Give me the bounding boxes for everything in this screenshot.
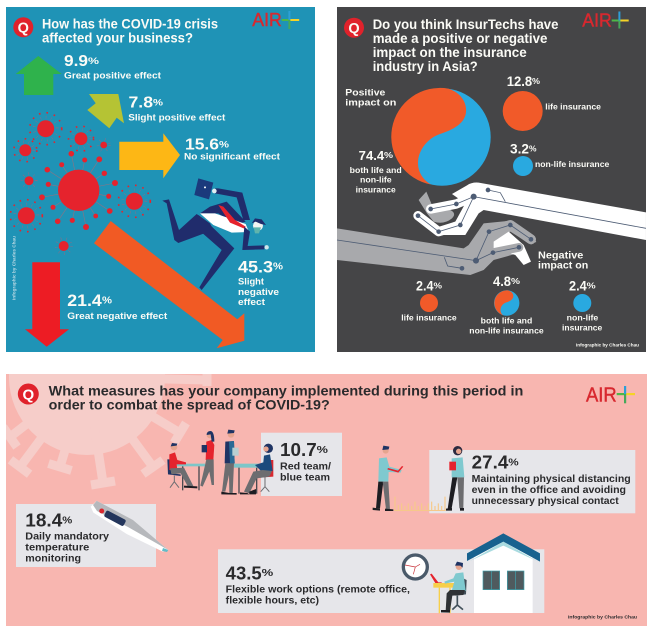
stat: slight negative effect [238, 258, 283, 308]
card: physical distancing: even in the office and avoiding [472, 485, 626, 496]
stat: 3.2 non-life insurance: non-life insurance [535, 159, 610, 169]
stat: 4.8 both: % [511, 277, 520, 286]
stat: 2.4 non-life insurance [562, 279, 603, 333]
watermark: large virus [6, 374, 212, 490]
stat: 12.8 life insurance [503, 74, 601, 131]
illustration: two people keeping distance [373, 446, 464, 511]
icon: Q badge [344, 18, 364, 38]
panel: business effect [6, 7, 315, 352]
stat: 74.4 both life and non-life: non-life [360, 174, 392, 184]
arrow: great positive [16, 56, 62, 95]
arrow: slight positive [87, 94, 124, 128]
stat: great negative effect [67, 291, 167, 321]
stat: great negative effect: 21.4 [67, 291, 102, 310]
stat: great negative effect: % [102, 296, 112, 306]
heading: order to combat the spread of COVID-19? [49, 397, 330, 413]
stat: 74.4 both life and non-life: both life and [350, 165, 402, 175]
icon: Q badge [13, 17, 33, 37]
card: red team / blue team: Red team/ [280, 461, 331, 472]
stat: 4.8 both [469, 274, 544, 336]
card: flexible work: Flexible work options (remote office, [226, 584, 410, 595]
logo: AIR+: AIR [582, 10, 612, 30]
illustration: robot and human hands [337, 183, 646, 275]
card: flexible work: % [262, 567, 274, 579]
card: flexible work [218, 549, 544, 613]
card: temperature monitoring: % [62, 514, 73, 526]
stat: 2.4 life insurance: life insurance [401, 313, 457, 323]
card: physical distancing: % [508, 456, 519, 468]
stat: 2.4 non-life insurance: 2.4 [569, 279, 587, 294]
credit: Infographic by Charles Chau [12, 236, 16, 300]
stat: 74.4 both life and non-life: % [384, 151, 393, 160]
logo: AIR+ [582, 10, 629, 30]
stat: slight negative effect: negative [238, 287, 279, 298]
stat: great positive effect: % [88, 56, 99, 66]
label: negative impact on [538, 251, 588, 272]
stat: 3.2 non-life insurance [510, 141, 610, 176]
stat: 12.8 life insurance: % [532, 77, 540, 86]
card: red team / blue team: % [317, 444, 329, 456]
heading: impact on the insurance [373, 45, 527, 60]
logo: AIR+ [252, 10, 299, 30]
stat: 3.2 non-life insurance: 3.2 [510, 141, 529, 156]
heading: made a positive or negative [373, 31, 548, 46]
card: temperature monitoring [16, 504, 156, 567]
stat: slight positive effect: Slight positive effect [128, 112, 225, 123]
logo: AIR+ [586, 385, 635, 407]
arrow: great negative [25, 262, 69, 347]
stat: great positive effect: 9.9 [64, 53, 88, 70]
stat: 12.8 life insurance: life insurance [545, 102, 601, 112]
card: physical distancing: Maintaining physical distancing [472, 474, 631, 485]
card: red team / blue team: 10.7 [280, 440, 317, 460]
stat: 4.8 both: both life and [481, 316, 532, 326]
stat: 74.4 both life and non-life [350, 148, 402, 194]
card: flexible work: 43.5 [226, 563, 262, 583]
stat: 74.4 both life and non-life: 74.4 [359, 148, 385, 163]
stat: no significant effect: % [219, 140, 229, 150]
figure: falling businessman [162, 178, 269, 290]
stat: slight negative effect: % [273, 262, 283, 272]
card: red team / blue team [261, 433, 342, 496]
stat: slight positive effect: 7.8 [128, 94, 153, 112]
panel background [6, 374, 647, 626]
label: positive impact on [345, 88, 396, 108]
chart: yin-yang both life and non-life [391, 88, 491, 186]
heading: Do you think InsurTechs have [373, 17, 559, 32]
stat: great positive effect [64, 53, 161, 80]
logo: AIR+: AIR [586, 385, 617, 407]
stat: 2.4 life insurance: 2.4 [416, 279, 434, 294]
heading: industry in Asia? [373, 59, 478, 74]
stat: slight negative effect: effect [238, 297, 266, 308]
icon: Q badge: Q [22, 386, 34, 404]
card: physical distancing [429, 450, 635, 513]
card: red team / blue team: blue team [280, 472, 330, 483]
heading [49, 383, 523, 413]
panel background [6, 7, 315, 352]
stat: 3.2 non-life insurance: % [529, 144, 536, 153]
stat: slight negative effect: 45.3 [238, 258, 273, 276]
illustration: house, clock and home worker [403, 533, 540, 613]
panel background [337, 7, 646, 352]
stat: 4.8 both: non-life insurance [469, 326, 544, 336]
stat: 2.4 life insurance [401, 279, 457, 323]
logo: AIR+: AIR [252, 10, 282, 30]
heading: How has the COVID-19 crisis [42, 16, 218, 32]
heading [373, 17, 559, 74]
stat: slight positive effect: % [153, 98, 163, 108]
label: positive impact on: impact on [345, 97, 396, 108]
panel: company measures [6, 374, 647, 626]
stat: no significant effect: 15.6 [185, 136, 219, 154]
stat: slight positive effect [128, 94, 225, 123]
stat: 2.4 non-life insurance: non-life [567, 313, 599, 323]
label: negative impact on: Negative [538, 251, 584, 262]
label: positive impact on: Positive [345, 88, 385, 99]
stat: 2.4 life insurance: % [434, 282, 442, 291]
icon: Q badge: Q [18, 20, 29, 36]
stat: 4.8 both: 4.8 [493, 274, 511, 289]
arrow: no significant [119, 133, 180, 178]
stat: 74.4 both life and non-life: insurance [356, 184, 396, 194]
stat: 2.4 non-life insurance: % [587, 282, 596, 291]
card: temperature monitoring: temperature [25, 542, 90, 553]
stat: 2.4 non-life insurance: insurance [562, 323, 603, 333]
icon: Q badge: Q [348, 21, 360, 37]
stat: great negative effect: Great negative effect [67, 310, 167, 321]
arrow: slight negative [94, 221, 244, 348]
icon: Q badge [18, 384, 39, 404]
card: flexible work: flexible hours, etc) [226, 595, 319, 606]
heading [42, 16, 218, 46]
icon: virus cluster [10, 113, 150, 254]
card: physical distancing: 27.4 [472, 453, 508, 473]
stat: no significant effect: No significant effect [184, 152, 280, 162]
stat: slight negative effect: Slight [238, 276, 265, 288]
card: temperature monitoring: monitoring [25, 553, 81, 564]
label: negative impact on: impact on [538, 261, 588, 272]
stat: no significant effect [184, 136, 280, 162]
card: physical distancing: unnecessary physical contact [472, 496, 619, 507]
card: temperature monitoring: Daily mandatory [25, 531, 109, 542]
credit: Infographic by Charles Chau [576, 342, 639, 348]
credit: Infographic by Charles Chau [568, 614, 637, 620]
heading: What measures has your company implemented during this period in [49, 383, 523, 399]
panel: InsurTech impact [337, 7, 646, 352]
illustration: team meeting [167, 430, 273, 495]
heading: affected your business? [42, 30, 193, 46]
icon: thermometer [91, 501, 168, 552]
stat: great positive effect: Great positive effect [64, 70, 161, 80]
stat: 12.8 life insurance: 12.8 [507, 74, 533, 89]
card: temperature monitoring: 18.4 [25, 511, 62, 531]
